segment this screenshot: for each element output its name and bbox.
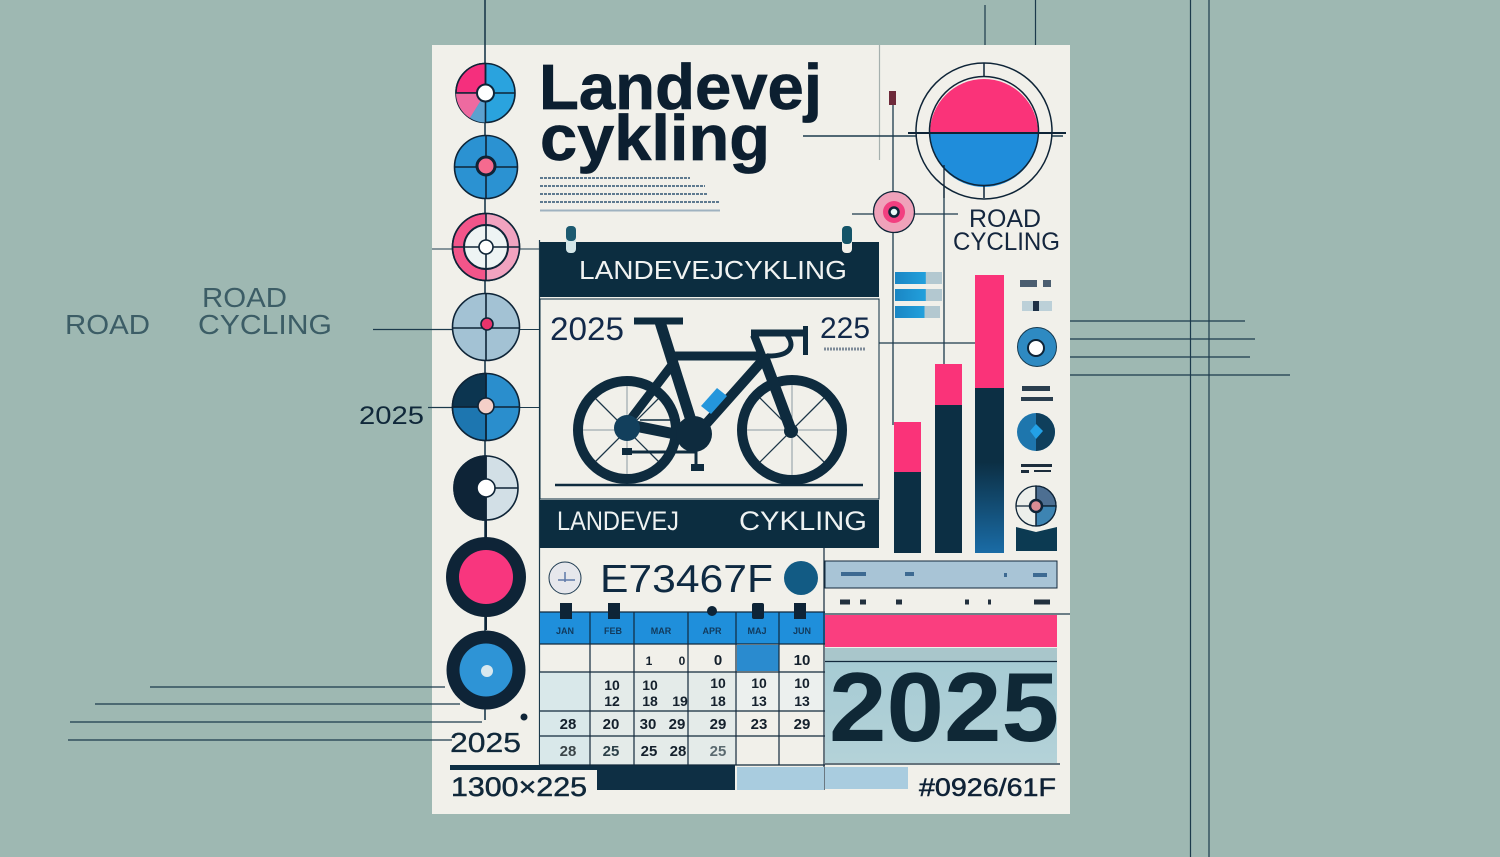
day numbers: 29 — [710, 716, 726, 733]
calendar title row: E73467F — [600, 558, 773, 601]
left label: road cycling: CYCLING — [198, 309, 332, 340]
day numbers: 1 — [646, 654, 653, 668]
legend stripes — [895, 272, 942, 318]
ground line — [555, 484, 863, 486]
highlighted day — [737, 645, 779, 671]
day numbers: 13 — [794, 693, 810, 709]
left label: road cycling — [198, 282, 332, 340]
big 2025 panel: 2025 — [829, 652, 1059, 762]
label: road cycling right: CYCLING — [953, 228, 1060, 256]
pale corner block — [825, 767, 908, 789]
icon: circle 1 — [456, 64, 515, 122]
poster structure lines — [68, 0, 1070, 765]
info panel right — [825, 561, 1057, 588]
side icon 2 — [1017, 413, 1055, 451]
calendar grid — [540, 548, 825, 790]
day numbers: 28 — [560, 743, 576, 760]
day numbers: 10 — [794, 652, 810, 669]
front wheel — [742, 380, 842, 480]
day numbers: 18 — [710, 693, 726, 709]
year left: 2025 — [550, 311, 624, 347]
calendar header — [540, 612, 825, 644]
bottom left code: 1300×225 — [451, 772, 587, 802]
label: road cycling right — [953, 205, 1060, 256]
weekday labels: JUN — [793, 626, 811, 636]
bar chart — [894, 275, 1004, 553]
icon: circle 5 — [452, 374, 520, 440]
band: landevej cykling — [540, 500, 879, 548]
pale day cells — [540, 672, 589, 765]
day numbers: 10 — [751, 675, 767, 691]
calendar title row — [549, 558, 818, 601]
icon: circle 7 — [446, 520, 526, 617]
icon: circle 2 — [454, 136, 518, 198]
day numbers: 12 — [604, 693, 620, 709]
day numbers: 29 — [794, 716, 810, 733]
weekday labels: MAR — [651, 626, 672, 636]
day numbers: 29 — [669, 716, 685, 733]
small text lines under title — [540, 178, 720, 210]
weekday labels: APR — [702, 626, 722, 636]
small target icon — [874, 91, 914, 232]
day numbers: 13 — [751, 693, 767, 709]
day numbers: 10 — [642, 677, 658, 693]
poster sheet — [432, 45, 1070, 814]
small marks row — [840, 600, 1050, 604]
side icon 1 — [1018, 328, 1056, 366]
bar 3 — [975, 275, 1004, 553]
day numbers: 19 — [672, 693, 688, 709]
calendar clips — [566, 226, 852, 253]
band: landevej cykling: LANDEVEJ — [557, 506, 679, 536]
year right: 225 — [820, 312, 870, 345]
label: road cycling right: ROAD — [969, 205, 1041, 233]
header band: landevejcykling — [540, 242, 879, 297]
icon: circle 4 — [452, 294, 520, 360]
bar 1 — [894, 422, 921, 553]
side marks 2 — [1021, 386, 1053, 401]
calendar — [540, 548, 825, 790]
side icon 3 — [1016, 486, 1056, 526]
title — [539, 51, 822, 174]
day numbers: 25 — [710, 743, 726, 760]
band: landevej cykling: CYKLING — [739, 506, 867, 536]
header band: landevejcykling: LANDEVEJCYKLING — [579, 255, 847, 285]
bottom bar left — [450, 765, 735, 790]
side marks 3 — [1021, 464, 1052, 473]
dot — [520, 714, 528, 720]
day numbers: 10 — [604, 677, 620, 693]
frame — [630, 321, 806, 436]
large circle — [908, 63, 1066, 199]
left label: road cycling: ROAD — [202, 282, 287, 313]
title: cykling — [540, 102, 770, 174]
icon: circle 6 — [454, 456, 518, 520]
small caption — [824, 348, 865, 350]
day numbers: 28 — [670, 743, 686, 760]
bar 2 — [935, 364, 962, 553]
weekday labels: JAN — [556, 626, 574, 636]
bike panel — [540, 299, 879, 499]
side block — [1016, 527, 1057, 551]
day numbers: 25 — [641, 743, 657, 760]
day numbers: 28 — [560, 716, 576, 733]
icon: circle 8 — [446, 617, 526, 710]
rear wheel — [578, 381, 676, 479]
title: Landevej — [539, 51, 822, 123]
day numbers: 0 — [714, 652, 722, 669]
icon: circle 3 — [452, 214, 520, 280]
day numbers: 10 — [710, 675, 726, 691]
weekday labels — [556, 626, 811, 636]
chain and crank — [614, 415, 798, 471]
weekday labels: FEB — [604, 626, 623, 636]
left label: road: ROAD — [65, 309, 150, 340]
day numbers: 0 — [679, 654, 686, 668]
background guide lines — [985, 0, 1290, 857]
weekday labels: MAJ — [747, 626, 767, 636]
pink band — [825, 615, 1057, 647]
side icons column — [1016, 280, 1057, 551]
day numbers — [560, 652, 810, 760]
pale band — [825, 648, 1057, 661]
water bottle — [701, 388, 727, 414]
day numbers: 25 — [603, 743, 619, 760]
left label: 2025: 2025 — [359, 402, 424, 430]
day numbers: 10 — [794, 675, 810, 691]
day numbers: 23 — [751, 716, 767, 733]
day numbers: 20 — [603, 716, 619, 733]
day numbers: 18 — [642, 693, 658, 709]
binder tabs — [560, 603, 806, 619]
bottom right code: #0926/61F — [919, 774, 1056, 802]
day numbers: 30 — [640, 716, 656, 733]
icon: road bike — [555, 321, 863, 485]
pale bottom bar — [737, 767, 824, 790]
label: 2025 bottom left: 2025 — [450, 727, 521, 758]
side marks — [1020, 280, 1052, 311]
